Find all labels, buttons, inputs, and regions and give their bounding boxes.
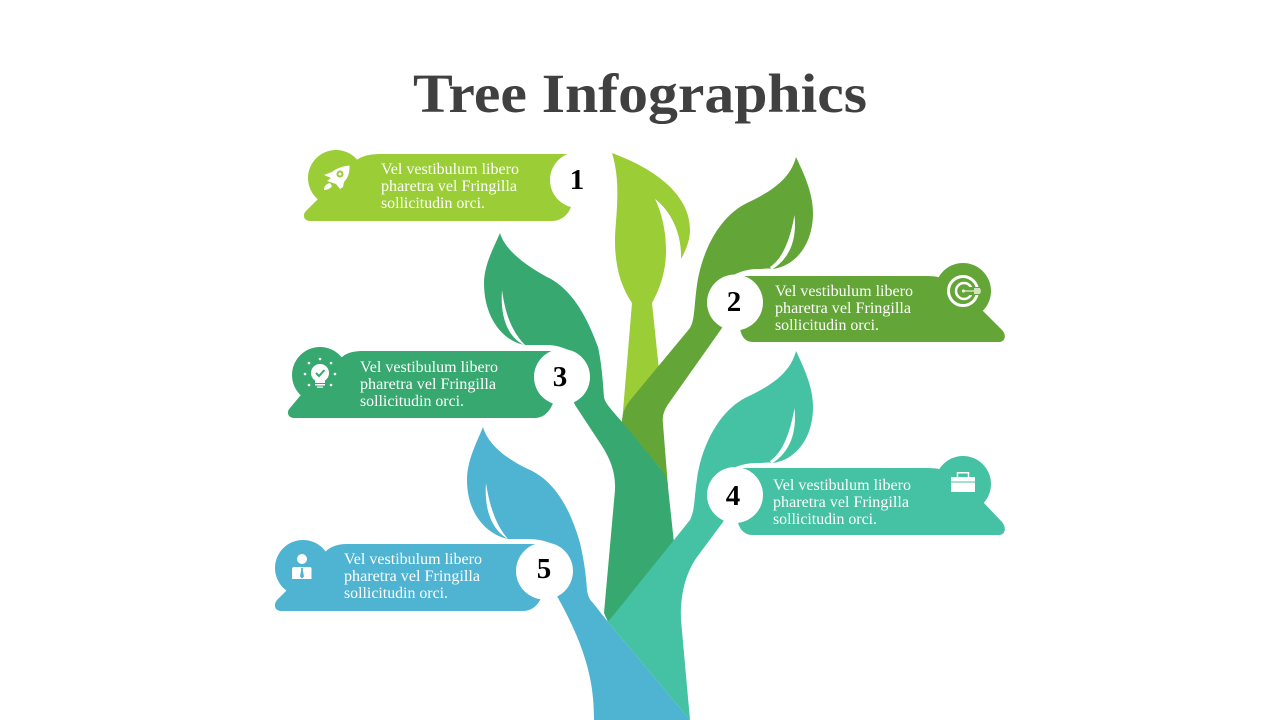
- text: step 5: sollicitudin orci.: [344, 585, 448, 602]
- panel: step 3: [288, 347, 590, 418]
- tree: light green branch and leaf: [612, 153, 690, 423]
- text: step 1: pharetra vel Fringilla: [381, 178, 517, 195]
- number badge 2: 2: [727, 286, 741, 318]
- panel: step 2: [707, 263, 1005, 342]
- panel: step 1: [304, 150, 606, 221]
- number badge 5: [516, 542, 573, 600]
- text: step 3: pharetra vel Fringilla: [360, 376, 496, 393]
- text: step 1: sollicitudin orci.: [381, 195, 485, 212]
- icon: light bulb: [304, 358, 336, 388]
- text: step 4: [773, 477, 911, 528]
- tree: blue branch and leaf: [467, 427, 690, 720]
- text: step 4: Vel vestibulum libero: [773, 477, 911, 494]
- text: step 2: Vel vestibulum libero: [775, 283, 913, 300]
- number badge 1: [550, 152, 606, 208]
- text: step 3: sollicitudin orci.: [360, 393, 464, 410]
- text: step 4: pharetra vel Fringilla: [773, 494, 909, 511]
- icon: person with tie: [292, 554, 312, 579]
- panel: step 4: [707, 456, 1005, 535]
- text: step 5: pharetra vel Fringilla: [344, 568, 480, 585]
- number badge 3: 3: [553, 361, 567, 393]
- text: step 3: Vel vestibulum libero: [360, 359, 498, 376]
- tree: green branch and leaf: [622, 157, 813, 487]
- text: step 5: Vel vestibulum libero: [344, 551, 482, 568]
- number badge 4: [707, 467, 763, 523]
- text: step 1: Vel vestibulum libero: [381, 161, 519, 178]
- text: step 1: [381, 161, 519, 212]
- number badge 3: [534, 349, 590, 405]
- number badge 4: 4: [726, 480, 740, 512]
- number badge 2: [707, 274, 763, 330]
- text: step 2: [775, 283, 913, 334]
- title: Tree Infographics: [413, 63, 867, 124]
- text: step 5: [344, 551, 482, 602]
- panel: step 5: [275, 540, 573, 611]
- number badge 1: 1: [570, 164, 584, 196]
- text: step 4: sollicitudin orci.: [773, 511, 877, 528]
- icon: target: [948, 276, 983, 306]
- number badge 5: 5: [537, 553, 551, 585]
- text: step 2: sollicitudin orci.: [775, 317, 879, 334]
- tree: teal branch and leaf: [608, 351, 813, 720]
- tree: dark green branch and leaf: [484, 233, 674, 622]
- icon: briefcase: [951, 473, 975, 492]
- text: step 2: pharetra vel Fringilla: [775, 300, 911, 317]
- icon: rocket: [324, 166, 350, 190]
- text: step 3: [360, 359, 498, 410]
